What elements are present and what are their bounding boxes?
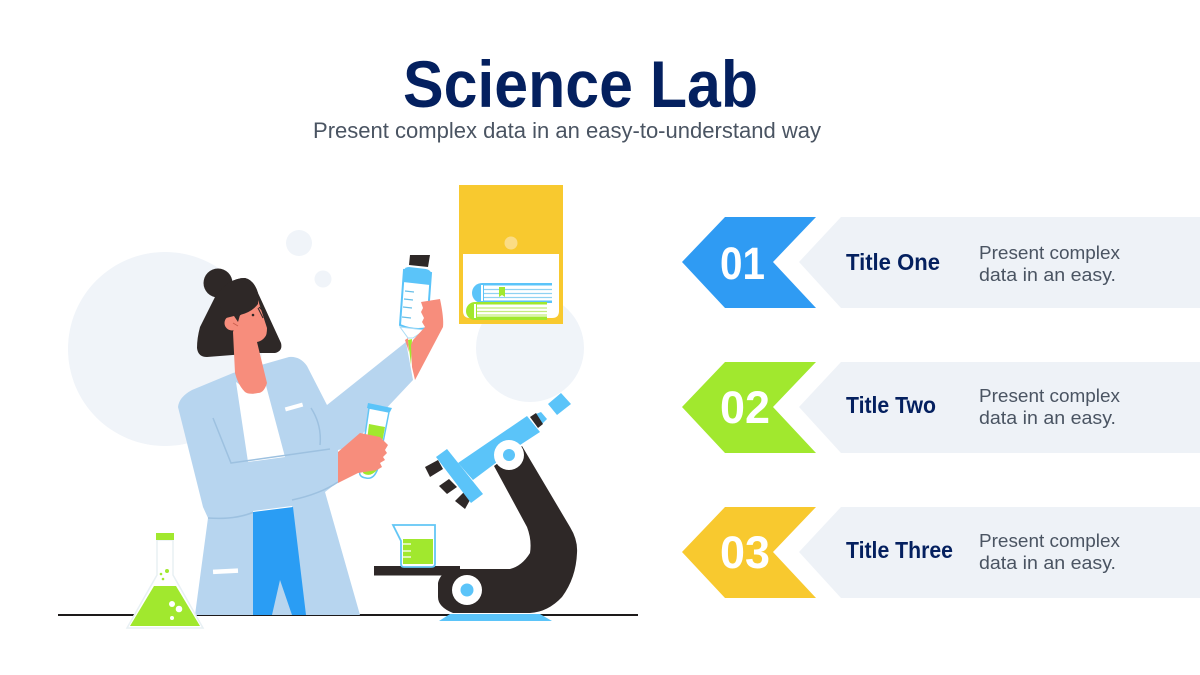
beaker: [393, 525, 435, 567]
number 02: 02: [720, 382, 770, 433]
text: item 03 description: data in an easy.: [979, 552, 1116, 573]
test tube: [360, 403, 392, 478]
microscope tube: [436, 393, 571, 503]
scientist figure: [178, 255, 443, 615]
icon: green book: [466, 302, 547, 320]
text: item 01 description: data in an easy.: [979, 264, 1116, 285]
text: item 01 description: Present complex: [979, 242, 1121, 263]
chevron 01: [682, 217, 816, 308]
microscope arm: [438, 446, 577, 613]
stage: [374, 566, 460, 576]
heading: Title One: Title One: [846, 249, 940, 275]
trousers: [253, 507, 306, 615]
background circles: [68, 230, 584, 446]
raised hand and forearm: [411, 299, 443, 380]
heading: Title Two: Title Two: [846, 392, 936, 418]
ground line: [58, 614, 638, 616]
shirt: [236, 378, 285, 462]
chevron 03: [682, 507, 816, 598]
neck and face: [224, 300, 267, 394]
number 03: 03: [720, 527, 770, 578]
panel: item 01: [799, 217, 1200, 308]
objective lenses: [425, 460, 470, 509]
number 01: 01: [720, 238, 765, 289]
microscope: [374, 393, 577, 621]
title: Science Lab: [403, 47, 758, 121]
text: item 02 description: Present complex: [979, 385, 1121, 406]
wall cabinet with books: [459, 185, 563, 324]
item 01: [682, 217, 1200, 308]
text: item 03 description: Present complex: [979, 530, 1121, 551]
microscope knobs: [452, 440, 524, 605]
subtitle: Present complex data in an easy-to-understand way: [313, 118, 821, 143]
panel: item 03: [799, 507, 1200, 598]
hair fringe: [215, 278, 258, 322]
text: item 02 description: data in an easy.: [979, 407, 1116, 428]
hair: [197, 268, 281, 357]
coat folds and pockets: [208, 403, 338, 574]
bottle with liquid: [400, 255, 431, 365]
panel: item 02: [799, 362, 1200, 453]
heading: Title Three: Title Three: [846, 537, 953, 563]
item 02: [682, 362, 1200, 453]
lower hand: [338, 433, 388, 483]
icon: blue book: [472, 283, 552, 303]
microscope base: [439, 614, 552, 621]
chevron 02: [682, 362, 816, 453]
item 03: [682, 507, 1200, 598]
lab coat: [178, 342, 413, 615]
glasses and eye: [233, 307, 263, 326]
flask: [127, 533, 203, 628]
